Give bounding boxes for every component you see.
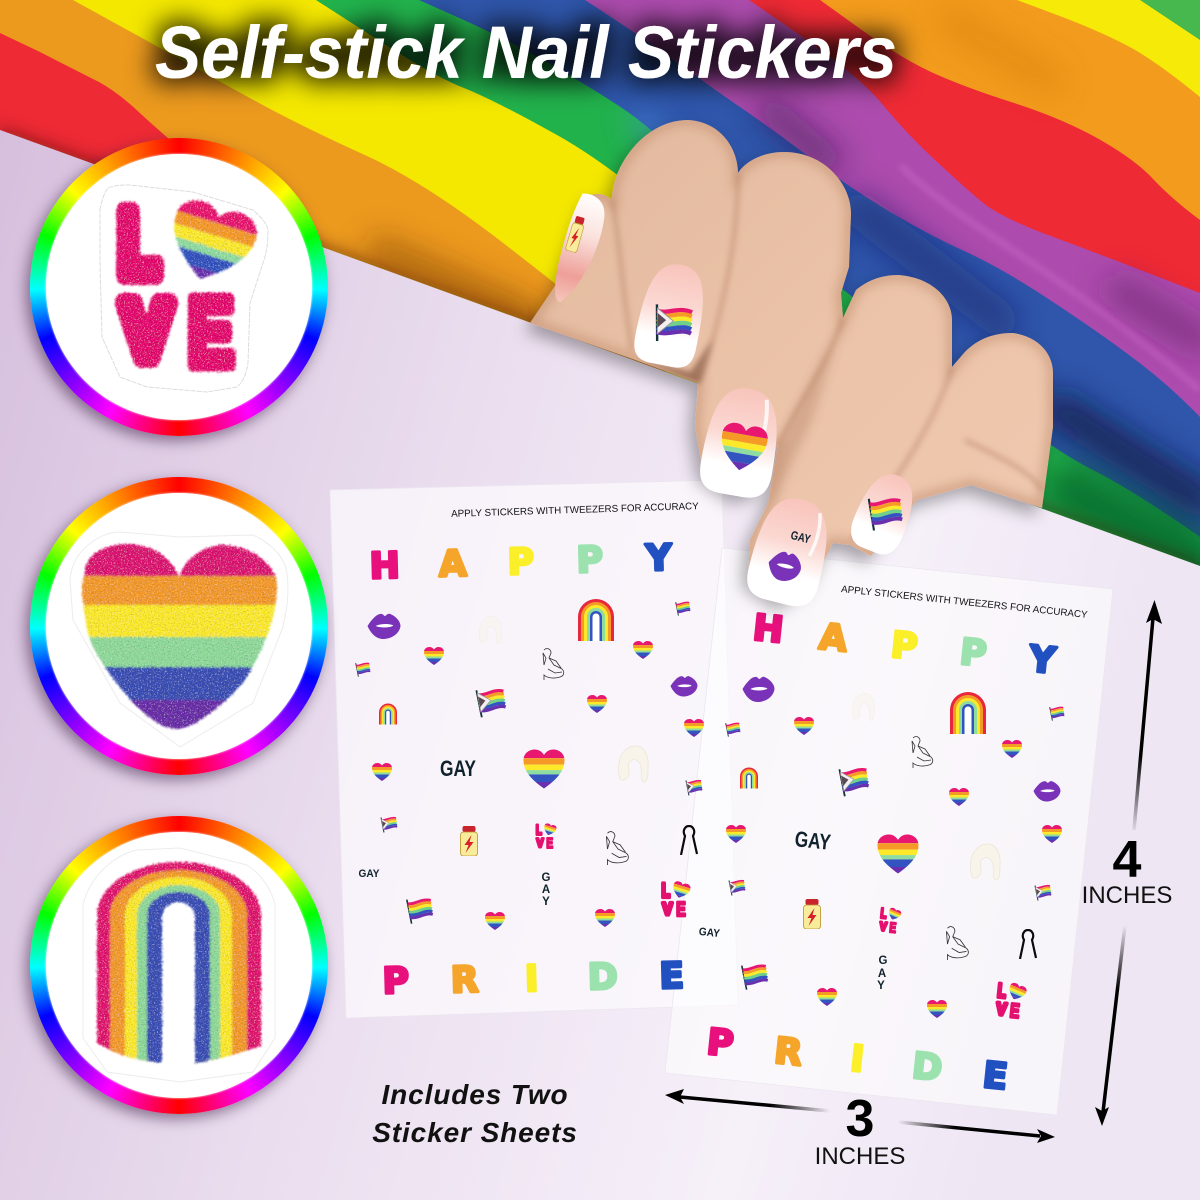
sheet two GAY labels: GAY [794, 826, 832, 855]
nail: heart sticker [696, 383, 786, 501]
sheet two GAY labels: G [879, 955, 888, 967]
sheet one mixed stickers [356, 599, 704, 930]
sheet two large LOVE sticker: L [996, 981, 1007, 1003]
sheet one PRIDE letters: I [524, 959, 539, 1000]
sheet two HAPPY letters: P [889, 625, 919, 668]
LOVE artwork [119, 193, 262, 386]
width dimension: 3 inches [665, 1089, 1055, 1170]
sheet two PRIDE letters: R [772, 1031, 804, 1074]
rainbow arch artwork [97, 862, 261, 1070]
sheet one HAPPY letters: H [369, 546, 400, 587]
flag fold shading [380, 20, 1200, 560]
sheet two GAY labels [698, 826, 888, 992]
sheet two GAY labels: GAY [698, 926, 721, 940]
hand silhouette [530, 120, 1053, 603]
sheet two small LOVE sticker: E [889, 920, 897, 937]
badge: LOVE sticker [30, 138, 328, 436]
sticker die-cut outline [83, 848, 275, 1082]
caption: includes two sticker sheets: Includes Two [381, 1079, 569, 1110]
nail: flag sticker [631, 259, 711, 371]
sheet one PRIDE letters: D [587, 957, 618, 998]
width number: 3 [846, 1090, 874, 1148]
sheet two PRIDE letters [705, 1022, 1010, 1098]
height arrow up [1134, 600, 1162, 830]
caption: includes two sticker sheets [372, 1079, 578, 1148]
sheet one PRIDE letters: R [450, 960, 479, 1001]
nail: pinky with jar sticker [548, 191, 611, 308]
badge: rainbow heart sticker [30, 477, 328, 775]
sheet one small LOVE sticker: V [536, 836, 544, 850]
sticker sheet two contents [698, 584, 1088, 1098]
sheet one GAY labels: G [542, 872, 551, 884]
sticker die-cut outline [100, 185, 268, 392]
LOVE artwork: E [188, 279, 234, 386]
hand with decorated nails [530, 120, 1053, 611]
finger edge shading [530, 120, 1053, 603]
sheet one large LOVE sticker [662, 880, 692, 921]
sheet two mixed stickers [726, 677, 1064, 1018]
sheet two small LOVE sticker: V [879, 919, 888, 934]
flag light streak [900, 165, 1200, 390]
sheet two instruction text: APPLY STICKERS WITH TWEEZERS FOR ACCURACY [841, 584, 1088, 621]
sheet two PRIDE letters: P [705, 1022, 735, 1065]
sheet two HAPPY letters: Y [1026, 639, 1058, 682]
sheet one GAY labels: A [542, 884, 550, 896]
sheet two PRIDE letters: D [910, 1046, 944, 1090]
height unit: INCHES [1082, 882, 1172, 909]
LOVE artwork: V [123, 286, 170, 375]
sheet one HAPPY letters: P [576, 540, 603, 581]
sheet one PRIDE letters [382, 956, 685, 1002]
rainbow heart artwork [80, 542, 279, 731]
sheet one large LOVE sticker: V [662, 899, 673, 918]
nail: GAY and lips stickers: GAY [789, 528, 812, 546]
sheet one GAY labels [358, 756, 551, 908]
caption: includes two sticker sheets: Sticker Sheets [372, 1117, 578, 1148]
sheet two small LOVE sticker [878, 906, 903, 937]
badge: rainbow arch sticker [30, 816, 328, 1114]
height dimension: 4 inches [1082, 600, 1172, 1126]
title: Self-stick Nail Stickers [155, 11, 897, 94]
sheet two HAPPY letters: H [751, 608, 785, 652]
sheet one large LOVE sticker: E [676, 899, 686, 921]
sheet one instruction text: APPLY STICKERS WITH TWEEZERS FOR ACCURACY [451, 501, 699, 520]
height number: 4 [1113, 831, 1142, 889]
sheet two small LOVE sticker: L [880, 906, 887, 921]
sheet two PRIDE letters: I [848, 1038, 866, 1081]
sticker die-cut outline [70, 532, 288, 747]
sheet one HAPPY letters: P [507, 542, 534, 583]
height arrow down [1095, 925, 1125, 1126]
sheet one small LOVE sticker: L [536, 822, 542, 838]
sheet two GAY labels: Y [877, 980, 885, 992]
sheet one HAPPY letters: A [438, 544, 467, 585]
sheet one GAY labels: GAY [358, 868, 380, 880]
sheet one HAPPY letters: Y [644, 538, 673, 579]
sheet one PRIDE letters: P [382, 961, 409, 1002]
width arrow left [665, 1089, 830, 1111]
sheet one small LOVE sticker [536, 822, 557, 852]
sheet one PRIDE letters: E [659, 956, 685, 997]
sticker sheet one contents [356, 501, 704, 1002]
sheet one HAPPY letters [369, 538, 673, 587]
sheet two backing [665, 548, 1113, 1115]
sheet one small LOVE sticker: E [546, 836, 553, 852]
sheet one GAY labels: GAY [440, 756, 476, 781]
sheet two large LOVE sticker: E [1009, 1000, 1021, 1023]
sheet two HAPPY letters: P [958, 632, 988, 675]
sheet two large LOVE sticker [994, 980, 1029, 1024]
LOVE artwork: L [119, 193, 159, 295]
sheet two GAY labels: A [878, 968, 886, 980]
sheet two HAPPY letters: A [817, 617, 849, 660]
sheet one backing [330, 480, 738, 1018]
sheet one GAY labels: Y [542, 896, 550, 908]
width arrow right [898, 1122, 1055, 1143]
sheet two large LOVE sticker: V [996, 999, 1008, 1019]
nail: GAY and lips stickers [742, 491, 838, 611]
width unit: INCHES [815, 1143, 905, 1170]
nail: rainbow flag sticker [845, 466, 923, 560]
sheet two HAPPY letters [751, 608, 1058, 682]
sheet two PRIDE letters: E [981, 1055, 1010, 1098]
sheet one large LOVE sticker: L [662, 881, 670, 902]
